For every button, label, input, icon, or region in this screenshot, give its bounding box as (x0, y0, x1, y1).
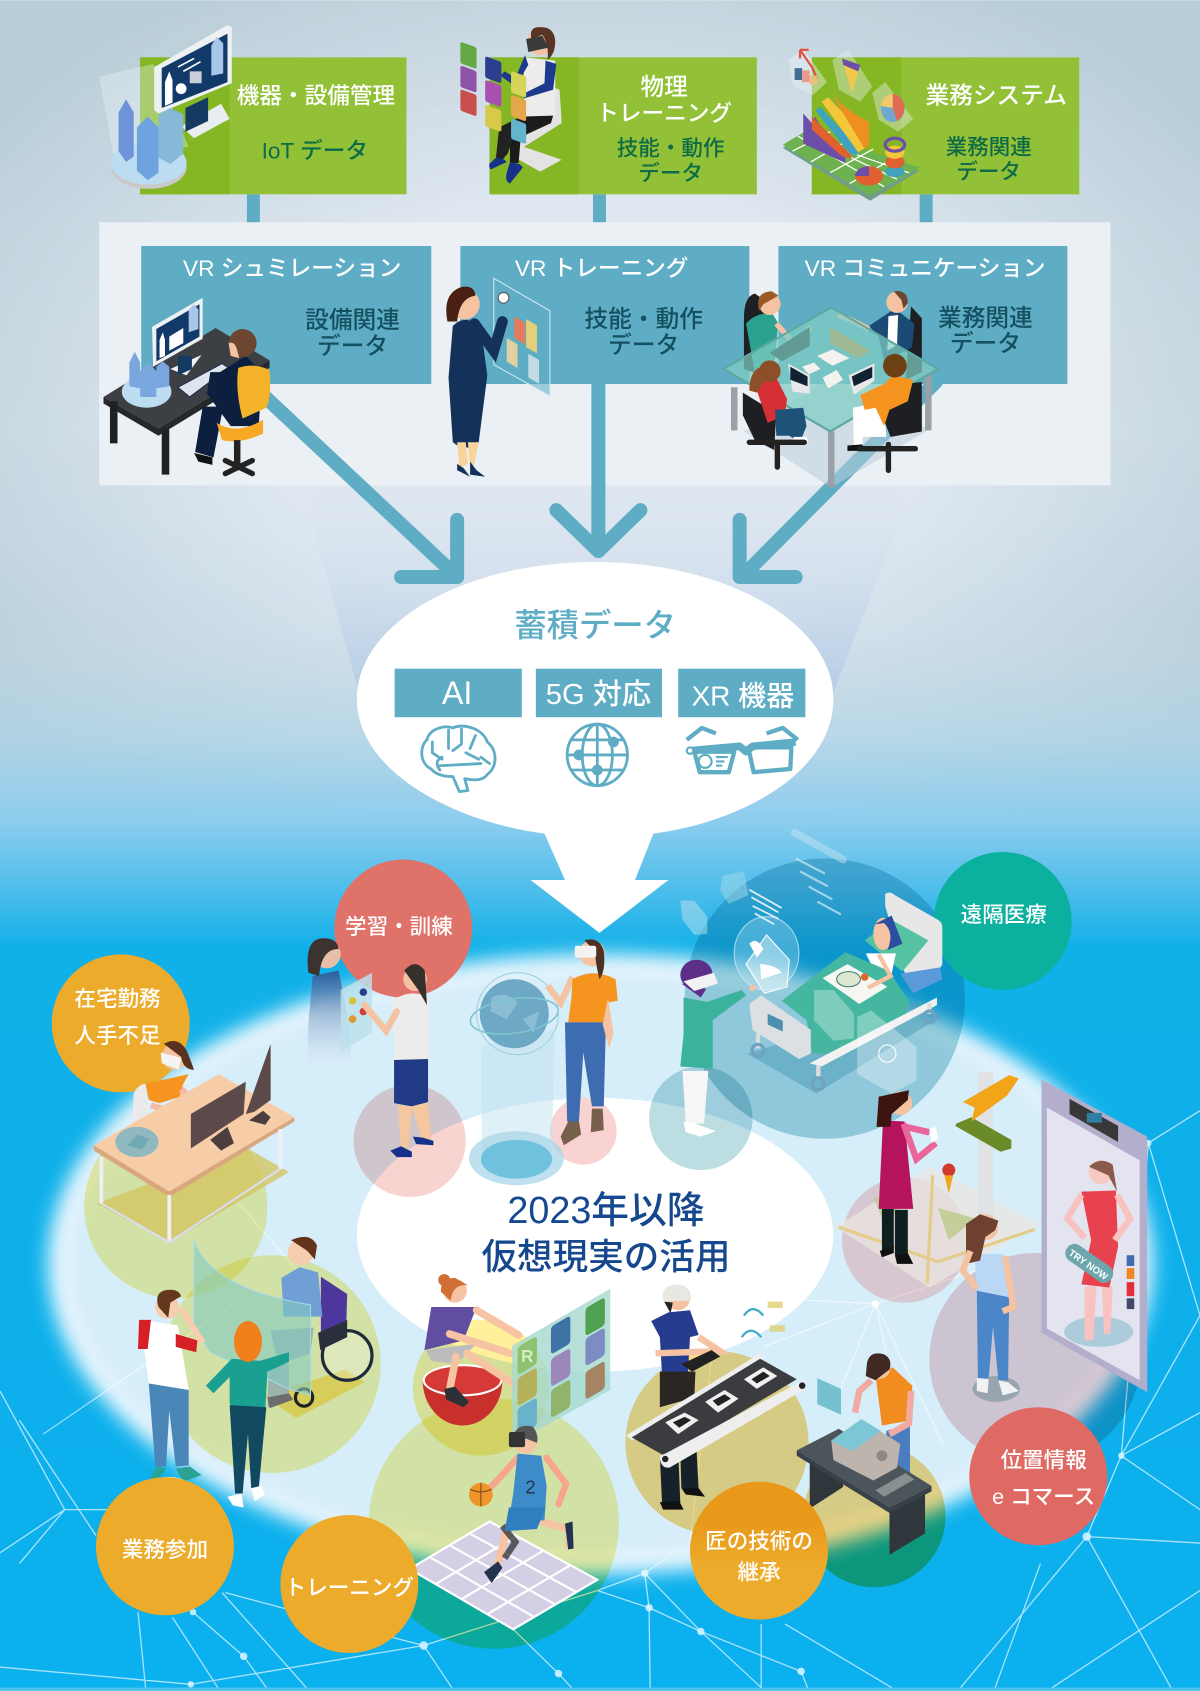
illustration: basketball player on grid: 2 (525, 1476, 536, 1497)
teal box: communication (778, 246, 1067, 384)
circle: remote work: 人手不足 (74, 1023, 161, 1048)
green box: physical training: トレーニング (596, 101, 732, 126)
teal box: training: 技能・動作 (584, 306, 703, 333)
icon: globe (567, 724, 627, 786)
green box: equipment (140, 57, 406, 194)
glow ellipse: stage (56, 962, 1145, 1566)
heading: 2023 utilization (481, 1189, 730, 1277)
green box: physical training: 技能・動作 (617, 135, 724, 160)
icon: business charts on isometric grid (783, 49, 920, 201)
illustration: medical holograms (680, 833, 843, 993)
illustration: learning pair (307, 938, 433, 1157)
illustration: woman at CAD desk (94, 1041, 294, 1242)
circle: location and e-commerce: e コマース (992, 1484, 1095, 1509)
tag: AI (395, 669, 522, 717)
circle: business participation (96, 1477, 234, 1615)
circle: training: トレーニング (285, 1575, 414, 1600)
arrow: center (556, 378, 640, 551)
network lines over stage (43, 1078, 1003, 1542)
green box: business system: 業務システム (925, 83, 1067, 110)
illustration: meeting at glass table (723, 291, 938, 488)
illustration: smart mirror: TRY NOW (1066, 1248, 1110, 1283)
illustration: hospital bed with patient (747, 893, 942, 1093)
background vignette (0, 0, 1200, 719)
teal box: simulation (141, 246, 431, 384)
illustration: conveyor belt and worker (626, 1284, 805, 1510)
tag: XR (678, 669, 805, 717)
teal box: simulation: データ (317, 332, 388, 360)
arrow: left (265, 397, 457, 577)
illustration: wheelchair user and helpers (138, 1237, 372, 1544)
illustration: doctor with VR headset (680, 960, 756, 1137)
illustration: woman looking at AR mirror (963, 1214, 1020, 1402)
circle: remote medicine: 遠隔医療 (961, 902, 1047, 927)
teal box: communication: VR コミュニケーション (805, 256, 1046, 281)
heading: accumulated data: 蓄積データ (514, 607, 676, 643)
tag: 5G: 5G 対応 (546, 678, 651, 711)
tag: AI: AI (442, 675, 472, 711)
green box: physical training: 物理 (640, 74, 688, 101)
teal box: training: データ (608, 331, 679, 359)
callout: accumulated data bubble (357, 562, 833, 933)
illustration: balance exercise: R (521, 1346, 534, 1366)
illustration: businesswoman and panel (446, 278, 550, 477)
network lines (0, 1111, 1200, 1688)
teal box: communication: 業務関連 (938, 305, 1033, 332)
teal box: simulation: VR シュミレーション (183, 256, 401, 281)
circle: remote work (52, 954, 190, 1092)
illustration: woman with hologram globe (468, 939, 618, 1185)
heading: 2023 utilization: 2023年以降 (507, 1189, 704, 1231)
green box: equipment: IoT データ (262, 138, 368, 164)
icon: seated VR woman with app tiles (460, 27, 562, 184)
connector 3 (920, 194, 933, 222)
circle: learning (334, 860, 472, 998)
circle: remote work: 在宅勤務 (74, 986, 161, 1011)
illustration: woman with map and signpost (836, 1072, 1040, 1288)
panel: input sources (99, 25, 1079, 222)
green box: business system: 業務関連 (946, 134, 1032, 159)
green box: physical training: データ (638, 160, 703, 185)
icon: XR glasses (687, 728, 798, 772)
circle: location and e-commerce: 位置情報 (1001, 1448, 1087, 1473)
illustration: engine technician (797, 1353, 932, 1555)
connector 1 (247, 194, 260, 222)
teal box: training: VR トレーニング (515, 256, 688, 281)
white center ellipse (357, 1098, 833, 1372)
circle: remote medicine (934, 852, 1072, 990)
icon: brain (422, 726, 495, 792)
green box: business system (812, 57, 1079, 194)
connector 2 (593, 194, 606, 222)
circle: craft succession (690, 1482, 828, 1620)
teal box: communication: データ (950, 330, 1021, 358)
circle: location and e-commerce (969, 1407, 1107, 1545)
circle: business participation: 業務参加 (122, 1537, 208, 1562)
bottom edge strip (0, 1688, 1200, 1691)
circle: craft succession: 匠の技術の (705, 1528, 813, 1553)
tag: XR: XR 機器 (691, 680, 794, 711)
illustration: smart mirror (1042, 1079, 1147, 1392)
green box: physical training (489, 57, 757, 194)
arrow: right (740, 382, 936, 577)
heading: 2023 utilization: 仮想現実の活用 (481, 1237, 730, 1277)
circle: craft succession: 継承 (737, 1560, 781, 1585)
illustration: balance exercise (423, 1274, 610, 1444)
teal box: simulation: 設備関連 (305, 307, 400, 334)
circle: learning: 学習・訓練 (345, 914, 453, 939)
teal box: training (460, 246, 749, 384)
circle: training (280, 1515, 418, 1653)
funnel backdrop (311, 485, 901, 701)
illustration: basketball player on grid (410, 1426, 597, 1629)
translucent usage circles (84, 858, 1141, 1649)
illustration: man at desk (104, 298, 270, 475)
tag: 5G (536, 669, 662, 717)
green box: business system: データ (956, 159, 1021, 184)
panel: VR layer (99, 222, 1111, 577)
green box: equipment: 機器・設備管理 (237, 84, 395, 109)
icon: smart city monitor (99, 25, 232, 189)
